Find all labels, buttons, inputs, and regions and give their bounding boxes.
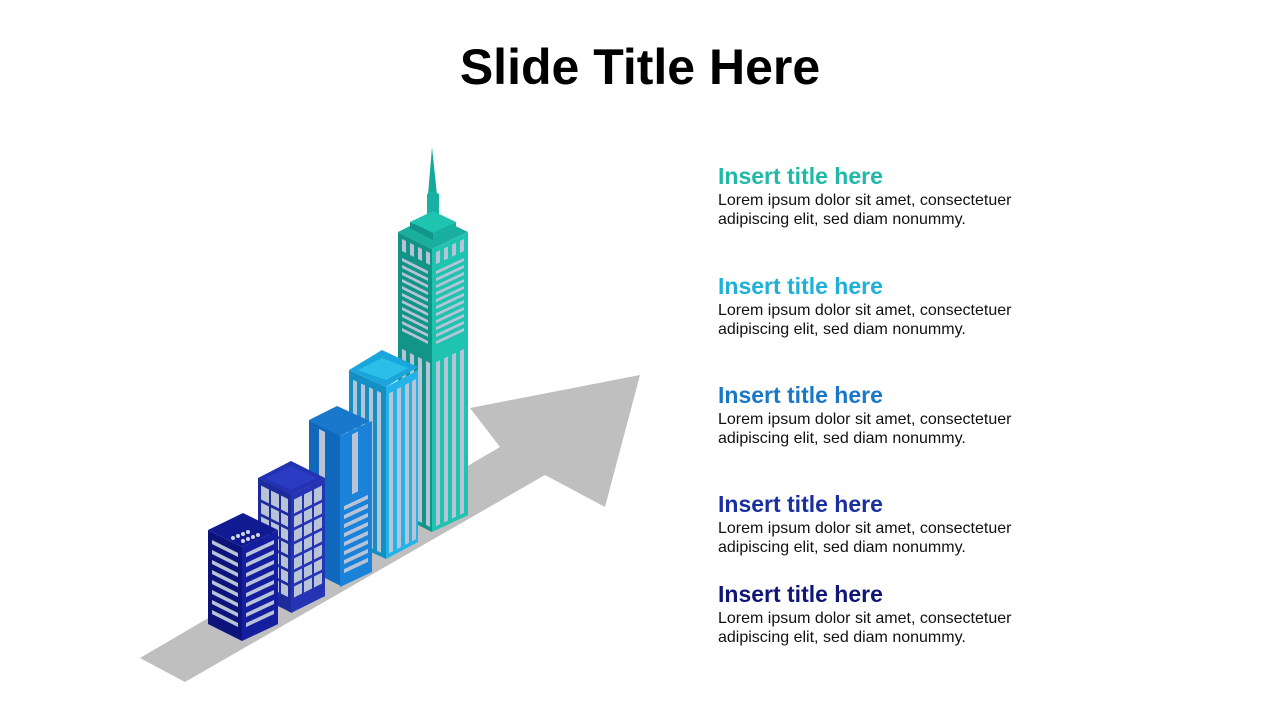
text item 3 bbox=[718, 382, 1012, 447]
text item 2 bbox=[718, 273, 1012, 338]
text item 2: Lorem ipsum dolor sit amet, consectetuer bbox=[718, 302, 1011, 319]
text item 4: Lorem ipsum dolor sit amet, consectetuer bbox=[718, 520, 1011, 537]
text item 5: Lorem ipsum dolor sit amet, consectetuer bbox=[718, 610, 1011, 627]
text item 4: adipiscing elit, sed diam nonummy. bbox=[718, 539, 966, 556]
text item 1: Lorem ipsum dolor sit amet, consectetuer bbox=[718, 192, 1011, 209]
building 4 light blue bbox=[349, 350, 418, 559]
text item 3: adipiscing elit, sed diam nonummy. bbox=[718, 430, 966, 447]
building 3 medium blue bbox=[309, 406, 372, 587]
building 1 navy bbox=[208, 513, 278, 641]
text item 2: adipiscing elit, sed diam nonummy. bbox=[718, 321, 966, 338]
arrow bbox=[140, 375, 640, 682]
text item 1 bbox=[718, 163, 1012, 228]
building 2 blue bbox=[258, 461, 325, 613]
text item 3: Insert title here bbox=[718, 382, 883, 408]
text item 5: Insert title here bbox=[718, 581, 883, 607]
text item 4 bbox=[718, 491, 1012, 556]
text item 1: Insert title here bbox=[718, 163, 883, 189]
text item 4: Insert title here bbox=[718, 491, 883, 517]
text item 1: adipiscing elit, sed diam nonummy. bbox=[718, 211, 966, 228]
title: Slide Title Here bbox=[460, 39, 820, 95]
text item 2: Insert title here bbox=[718, 273, 883, 299]
building 5 teal skyscraper bbox=[398, 147, 468, 532]
text item 5: adipiscing elit, sed diam nonummy. bbox=[718, 629, 966, 646]
text item 5 bbox=[718, 581, 1012, 646]
text item 3: Lorem ipsum dolor sit amet, consectetuer bbox=[718, 411, 1011, 428]
